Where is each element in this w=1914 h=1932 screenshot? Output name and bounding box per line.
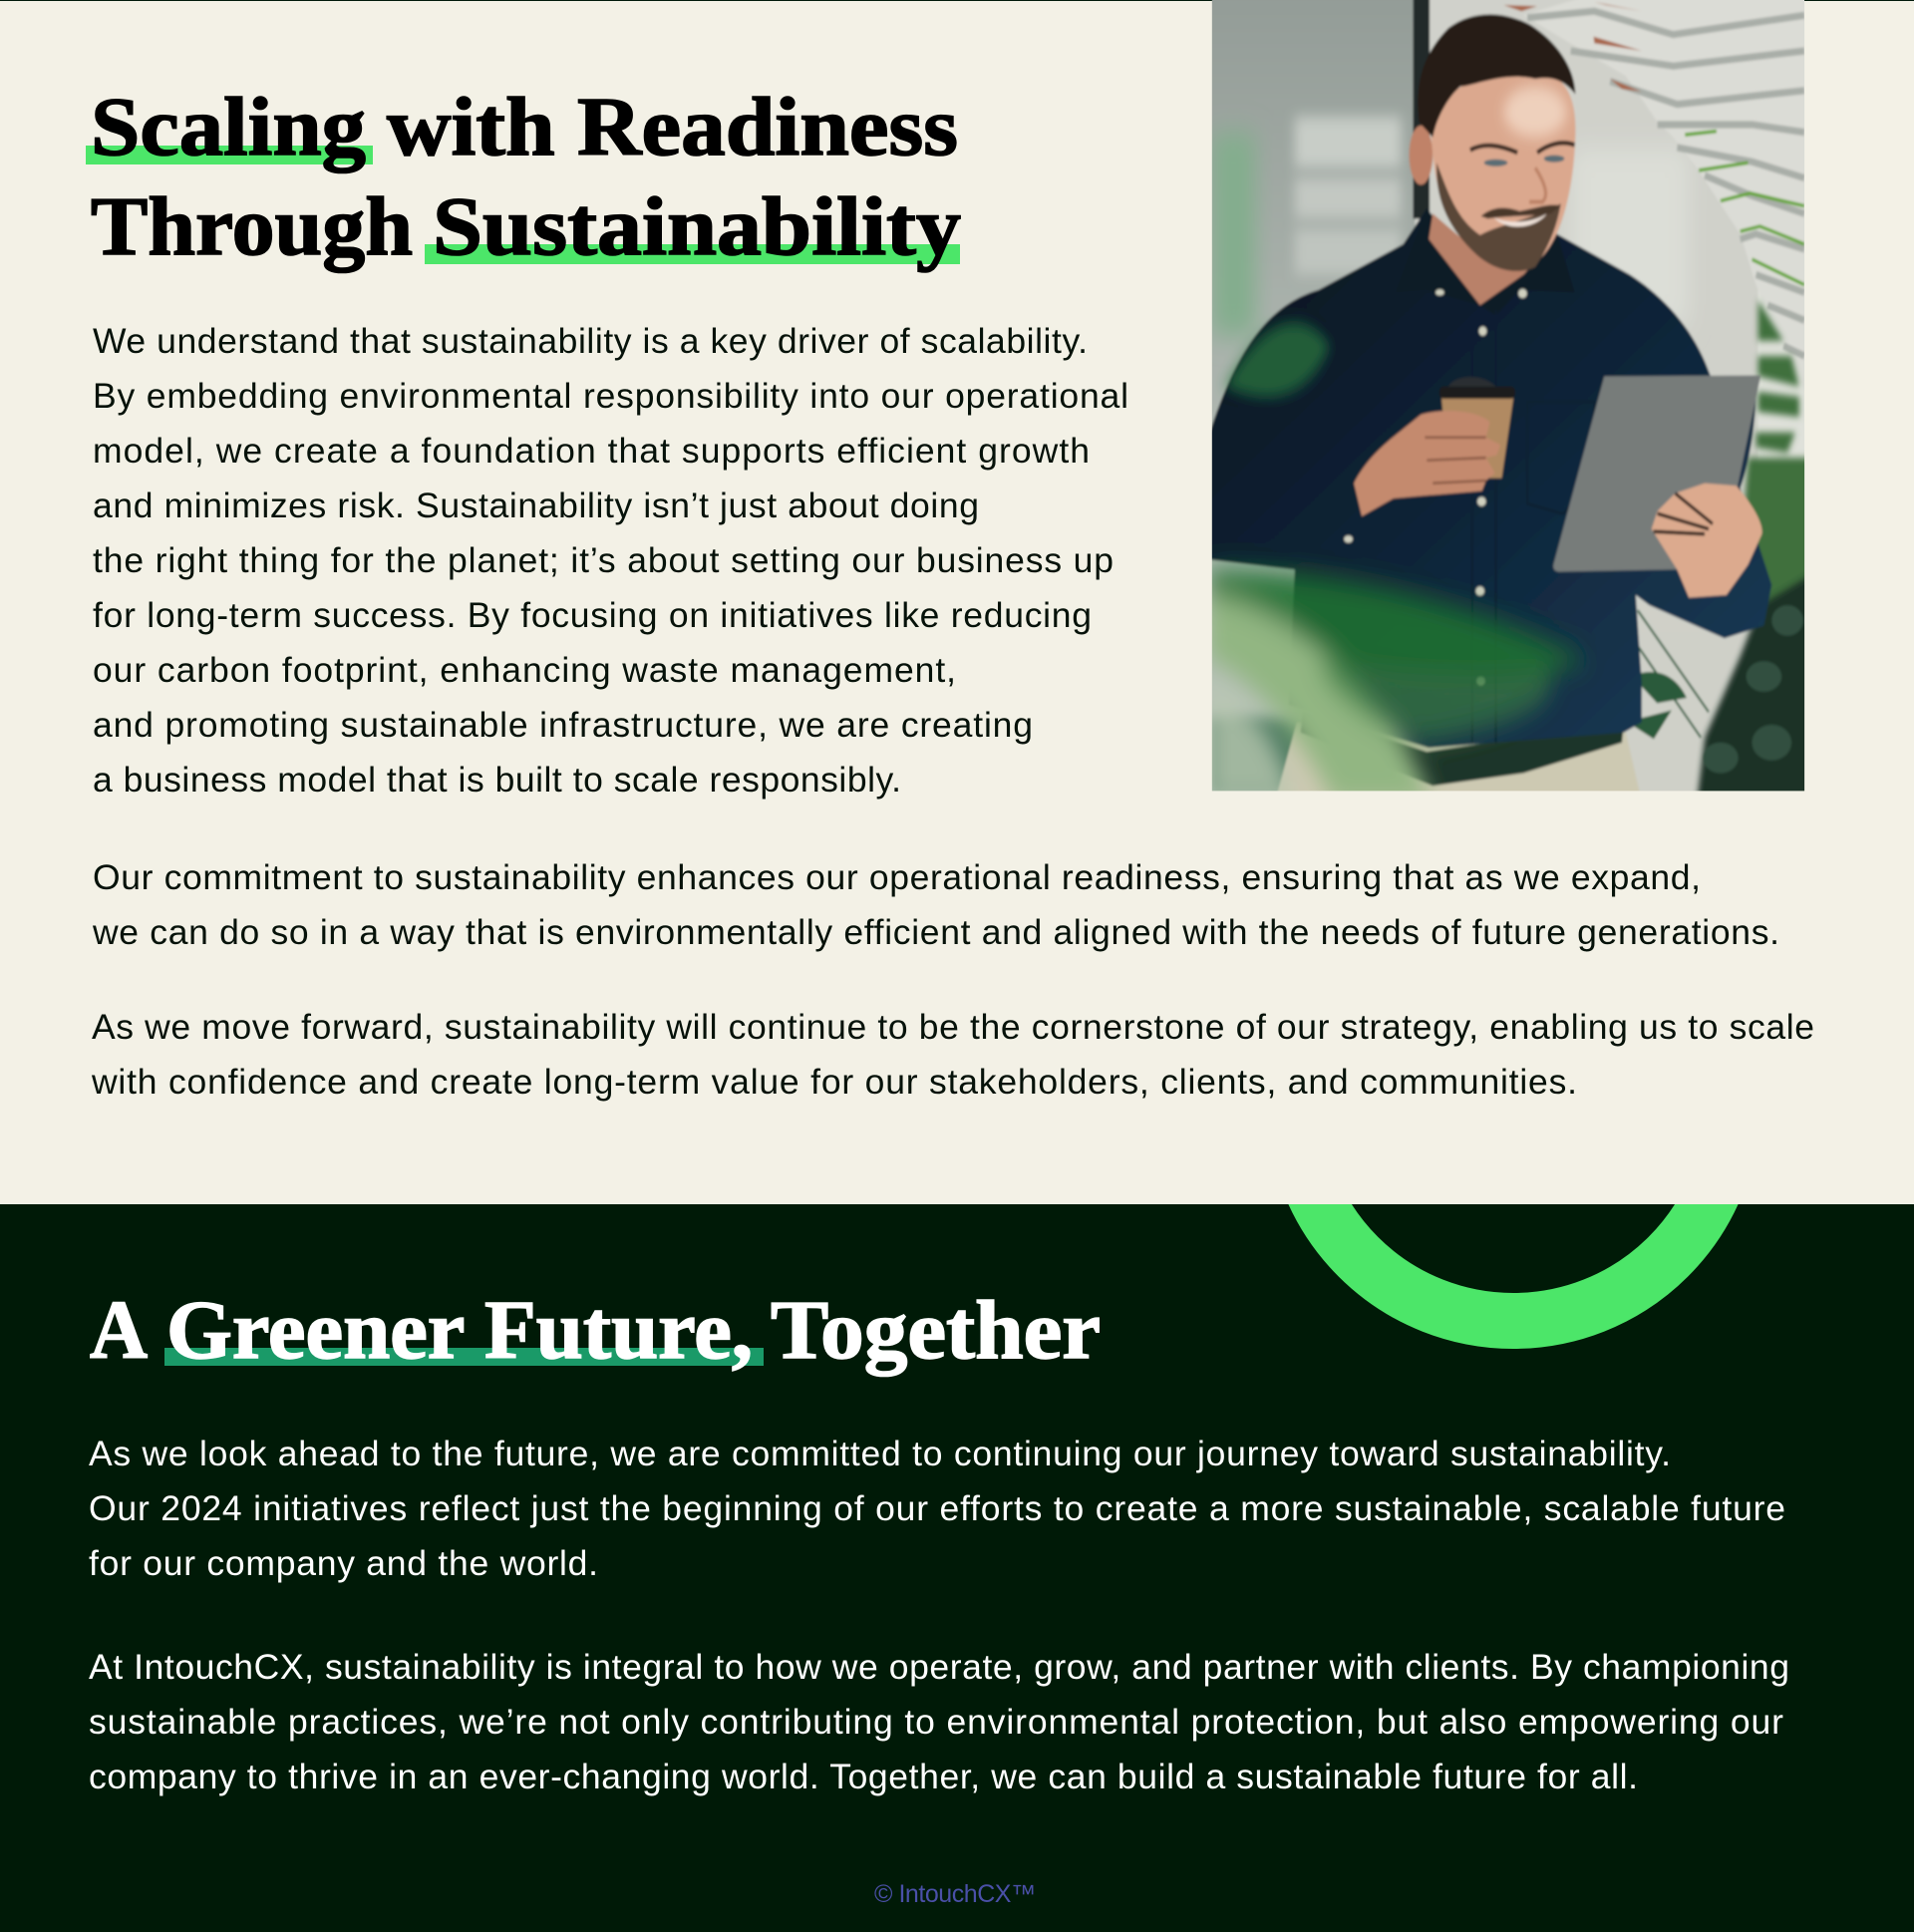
body paragraph 1: By embedding environmental responsibility into our operational	[93, 376, 1128, 416]
photo contents	[1208, 0, 1811, 804]
body paragraph 1: and minimizes risk. Sustainability isn’t just about doing	[93, 485, 979, 525]
body paragraph 1: the right thing for the planet; it’s about setting our business up	[93, 540, 1114, 580]
body paragraph 2: sustainable practices, we’re not only contributing to environmental protection, but also empowering our	[89, 1702, 1783, 1742]
shirt buttons	[1344, 289, 1527, 686]
footer copyright: © IntouchCX™	[874, 1880, 1036, 1908]
body paragraph 2	[89, 1647, 1789, 1796]
eyebrows	[1470, 143, 1575, 153]
body paragraph 2: At IntouchCX, sustainability is integral to how we operate, grow, and partner with clients. By championing	[89, 1647, 1789, 1687]
foreground blurred leaf top left	[1224, 322, 1330, 398]
body paragraph 1: for our company and the world.	[89, 1543, 598, 1583]
belt	[1300, 722, 1625, 788]
body paragraph 1	[93, 321, 1128, 800]
body paragraph 1: We understand that sustainability is a key driver of scalability.	[93, 321, 1088, 361]
body paragraph 1: our carbon footprint, enhancing waste management,	[93, 650, 956, 690]
finger gaps	[1654, 493, 1713, 534]
right plant	[1630, 300, 1811, 802]
eyes	[1484, 156, 1564, 166]
body paragraph 3: with confidence and create long-term value for our stakeholders, clients, and communities.	[91, 1062, 1577, 1102]
hair	[1418, 14, 1575, 138]
shirt collar	[1427, 211, 1573, 313]
body paragraph 3	[91, 1007, 1814, 1102]
face	[1431, 71, 1575, 268]
panel: scaling with readiness	[86, 81, 1814, 1102]
heading: scaling with readiness	[86, 81, 961, 273]
body paragraph 2: Our commitment to sustainability enhances our operational readiness, ensuring that as we expand,	[93, 857, 1701, 897]
shirt placket	[1472, 310, 1496, 743]
coffee cup	[1439, 377, 1515, 479]
heading line 2	[91, 180, 961, 273]
photo: man with coffee and tablet	[1208, 0, 1811, 804]
forehead highlight	[1503, 87, 1567, 138]
neck	[1427, 213, 1529, 307]
top edge line	[0, 0, 1914, 1]
body paragraph 1: for long-term success. By focusing on initiatives like reducing	[93, 595, 1092, 635]
heading text	[90, 1284, 1101, 1377]
body paragraph 1: model, we create a foundation that supports efficient growth	[93, 431, 1090, 471]
heading line 1: Scaling	[91, 81, 366, 173]
body paragraph 2: we can do so in a way that is environmentally efficient and aligned with the needs of future generations.	[92, 912, 1779, 952]
moustache	[1480, 205, 1561, 218]
panel: a greener future	[0, 882, 1914, 1932]
heading text: Together	[771, 1284, 1101, 1377]
beard	[1436, 162, 1561, 271]
shirt	[1208, 208, 1771, 748]
body paragraph 1: and promoting sustainable infrastructure, we are creating	[93, 705, 1033, 745]
heading: a greener future	[90, 1284, 1101, 1377]
trousers	[1277, 722, 1639, 792]
heading line 2: Through	[91, 180, 413, 273]
foreground blurred leaves	[1208, 569, 1590, 804]
highlight: Sustainability	[425, 244, 960, 264]
shirt pocket and sleeve folds	[1527, 402, 1594, 513]
photo background	[1208, 0, 1809, 804]
body paragraph 3: As we move forward, sustainability will continue to be the cornerstone of our strategy, enabling us to scale	[92, 1007, 1814, 1047]
dark background	[0, 1204, 1914, 1932]
hand holding tablet	[1652, 483, 1762, 597]
heading text: Greener Future,	[166, 1284, 753, 1377]
fan plant	[1504, 0, 1804, 361]
hand holding cup	[1354, 411, 1500, 516]
heading line 1: with Readiness	[387, 81, 958, 173]
body paragraph 1	[89, 1434, 1785, 1583]
tablet	[1553, 376, 1760, 571]
body paragraph 2	[92, 857, 1779, 952]
nose	[1529, 167, 1546, 202]
body paragraph 1: a business model that is built to scale responsibly.	[93, 760, 901, 800]
ear	[1410, 126, 1433, 184]
body paragraph 1: Our 2024 initiatives reflect just the beginning of our efforts to create a more sustainable, scalable future	[89, 1488, 1785, 1528]
smile	[1494, 213, 1547, 226]
heading line 2: Sustainability	[433, 180, 961, 273]
highlight: Greener Future	[164, 1348, 764, 1366]
decorative green ring	[1294, 882, 1733, 1321]
body paragraph 1: As we look ahead to the future, we are committed to continuing our journey toward sustainability.	[89, 1434, 1671, 1473]
heading line 1	[91, 81, 958, 173]
heading text: A	[90, 1284, 148, 1377]
body paragraph 2: company to thrive in an ever-changing world. Together, we can build a sustainable future for all.	[89, 1757, 1638, 1796]
highlight: Scaling	[86, 146, 373, 164]
